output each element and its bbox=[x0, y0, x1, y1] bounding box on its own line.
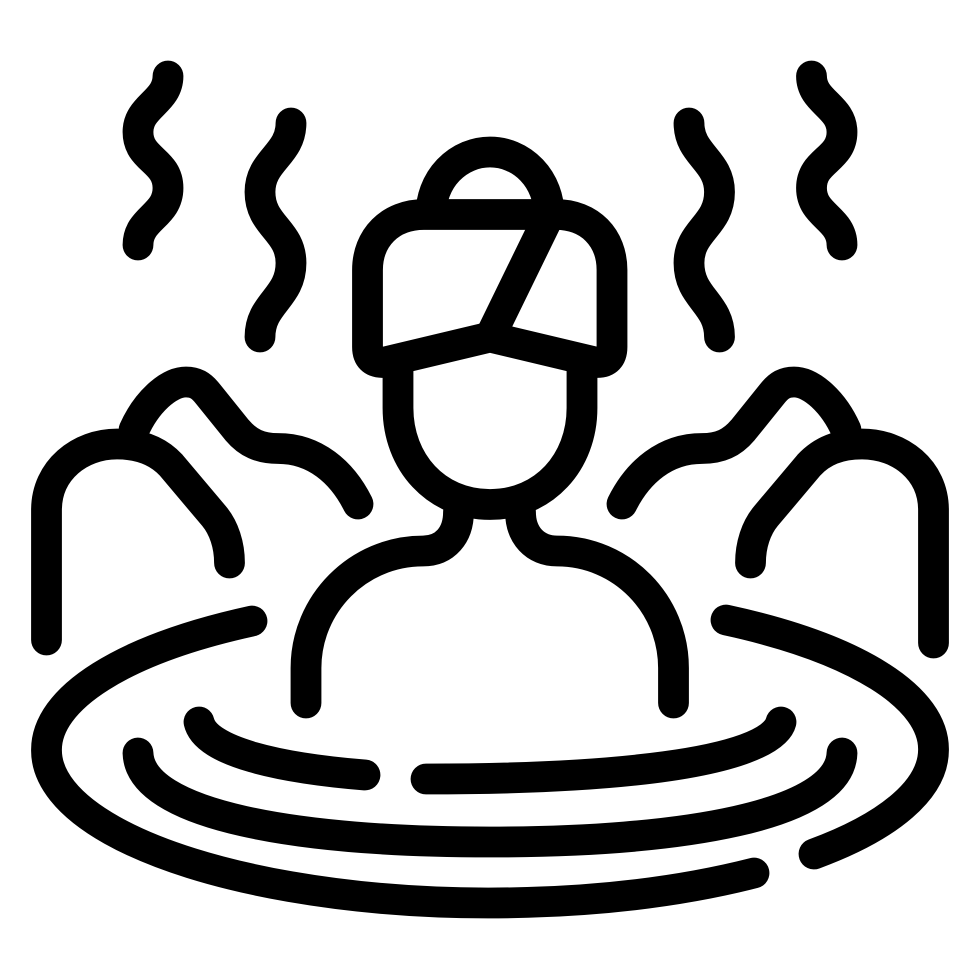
steam: inner right bbox=[689, 123, 720, 337]
steam: inner left bbox=[260, 123, 291, 337]
rocks: left bbox=[46, 382, 358, 640]
steam: far right bbox=[812, 76, 842, 245]
rocks: right bbox=[622, 382, 934, 643]
towel on head bbox=[368, 152, 612, 362]
steam: far left bbox=[138, 76, 168, 245]
water ripples bbox=[46, 620, 934, 903]
face bbox=[398, 365, 582, 504]
neck and shoulders bbox=[306, 512, 674, 703]
